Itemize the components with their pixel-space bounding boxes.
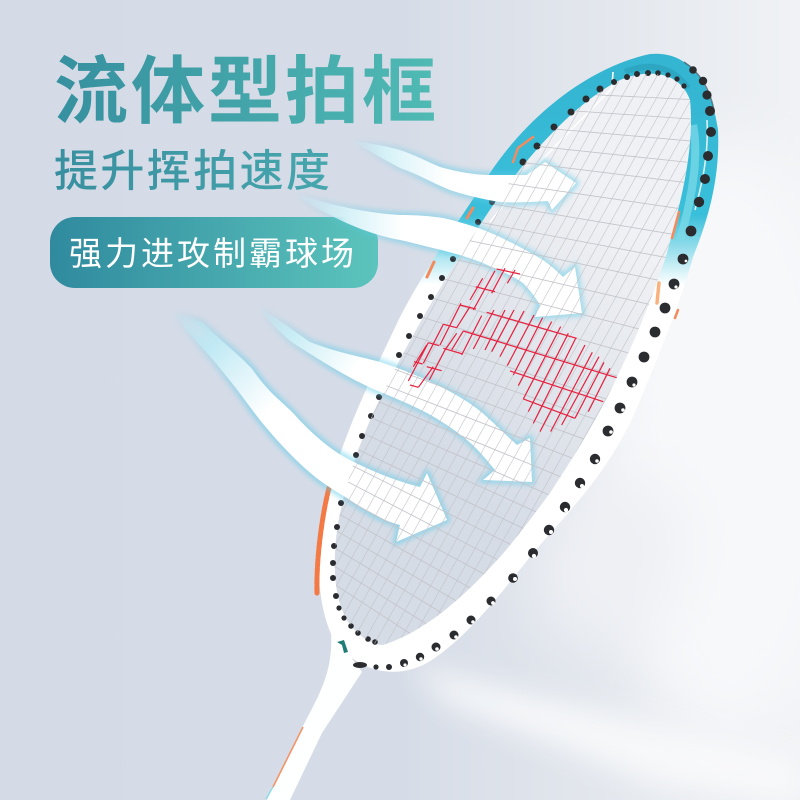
stencil main strings	[408, 268, 610, 432]
frame accents: white lines	[490, 72, 707, 222]
strings	[334, 74, 691, 644]
string holes: inner row	[330, 70, 687, 645]
frame shading at the head top	[625, 62, 714, 240]
title: 流体型拍框	[54, 50, 439, 133]
logo stencil: red strings	[408, 268, 617, 432]
arrow 2: upper wind arrow	[293, 193, 582, 317]
racket shaft	[266, 630, 362, 800]
logo on throat	[337, 640, 348, 653]
arrow 1: top wind arrow	[352, 141, 576, 210]
stencil cross strings	[410, 269, 617, 418]
racket frame	[319, 54, 718, 672]
badge: slogan pill	[50, 217, 378, 288]
arrow 3: middle wind arrow	[258, 307, 532, 482]
arrow 4: lower wind arrow	[173, 313, 447, 542]
subtitle: 提升挥拍速度	[54, 147, 332, 196]
string holes: outer row	[353, 66, 716, 670]
frame accents: orange	[317, 137, 679, 594]
string bed	[335, 74, 691, 645]
badge: slogan pill: 强力进攻制霸球场	[69, 235, 357, 272]
